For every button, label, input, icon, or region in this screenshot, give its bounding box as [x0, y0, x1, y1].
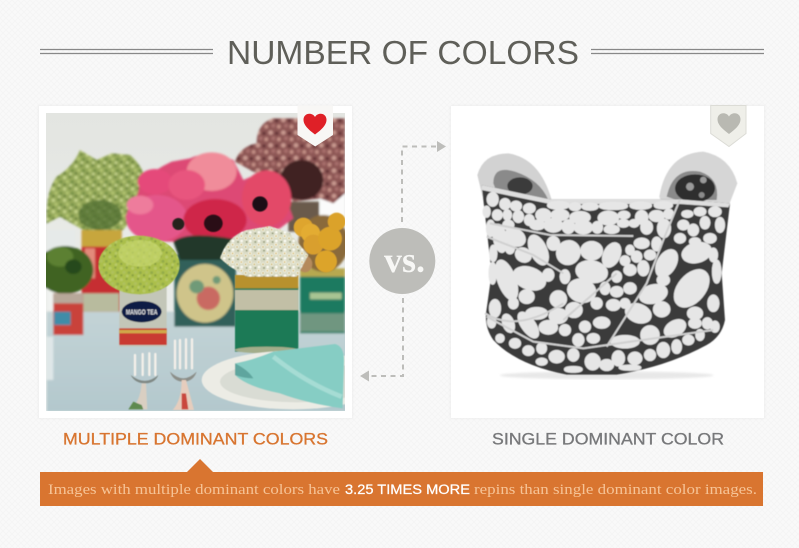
vs badge: vs.	[384, 240, 425, 280]
badge: unliked grey heart	[711, 106, 746, 146]
label: single dominant color: SINGLE DOMINANT COLOR	[492, 430, 724, 448]
icon: grey heart	[718, 113, 740, 134]
forks	[135, 339, 192, 375]
title rule: right	[591, 50, 764, 54]
callout text: repins than single dominant color images.	[474, 482, 757, 498]
title text: NUMBER OF COLORS	[227, 34, 579, 71]
red tin	[80, 244, 120, 313]
arrow: vs to multiple colors	[360, 298, 403, 382]
panel: single dominant color photo card	[450, 106, 764, 418]
photo: flowers in tea tins: MANGO TEA	[126, 308, 158, 317]
callout banner	[40, 459, 763, 506]
photo: flowers in tea tins	[46, 113, 345, 411]
yellow balls and green tin	[300, 270, 345, 333]
callout text: Images with multiple dominant colors have	[48, 482, 340, 498]
icon: red heart	[304, 114, 326, 134]
plate and napkin	[201, 350, 345, 410]
lime plant	[46, 150, 145, 230]
hydrangea and mango tin	[119, 287, 167, 347]
callout text: 3.25 TIMES MORE	[345, 482, 470, 497]
badge: liked red heart	[298, 106, 333, 146]
moss plant and small tin	[37, 246, 93, 294]
vs badge	[369, 228, 435, 294]
label: multiple dominant colors: MULTIPLE DOMINANT COLORS	[63, 430, 328, 448]
panel: multiple dominant colors photo card	[39, 106, 352, 418]
daisy tin	[235, 287, 298, 352]
pink flowers	[125, 155, 293, 242]
photo: silver cuff bracelet	[477, 152, 737, 379]
plum flowers	[235, 118, 345, 203]
floral tin	[174, 255, 236, 327]
arrow: vs to single color	[402, 141, 446, 222]
title rule: left	[40, 50, 213, 54]
